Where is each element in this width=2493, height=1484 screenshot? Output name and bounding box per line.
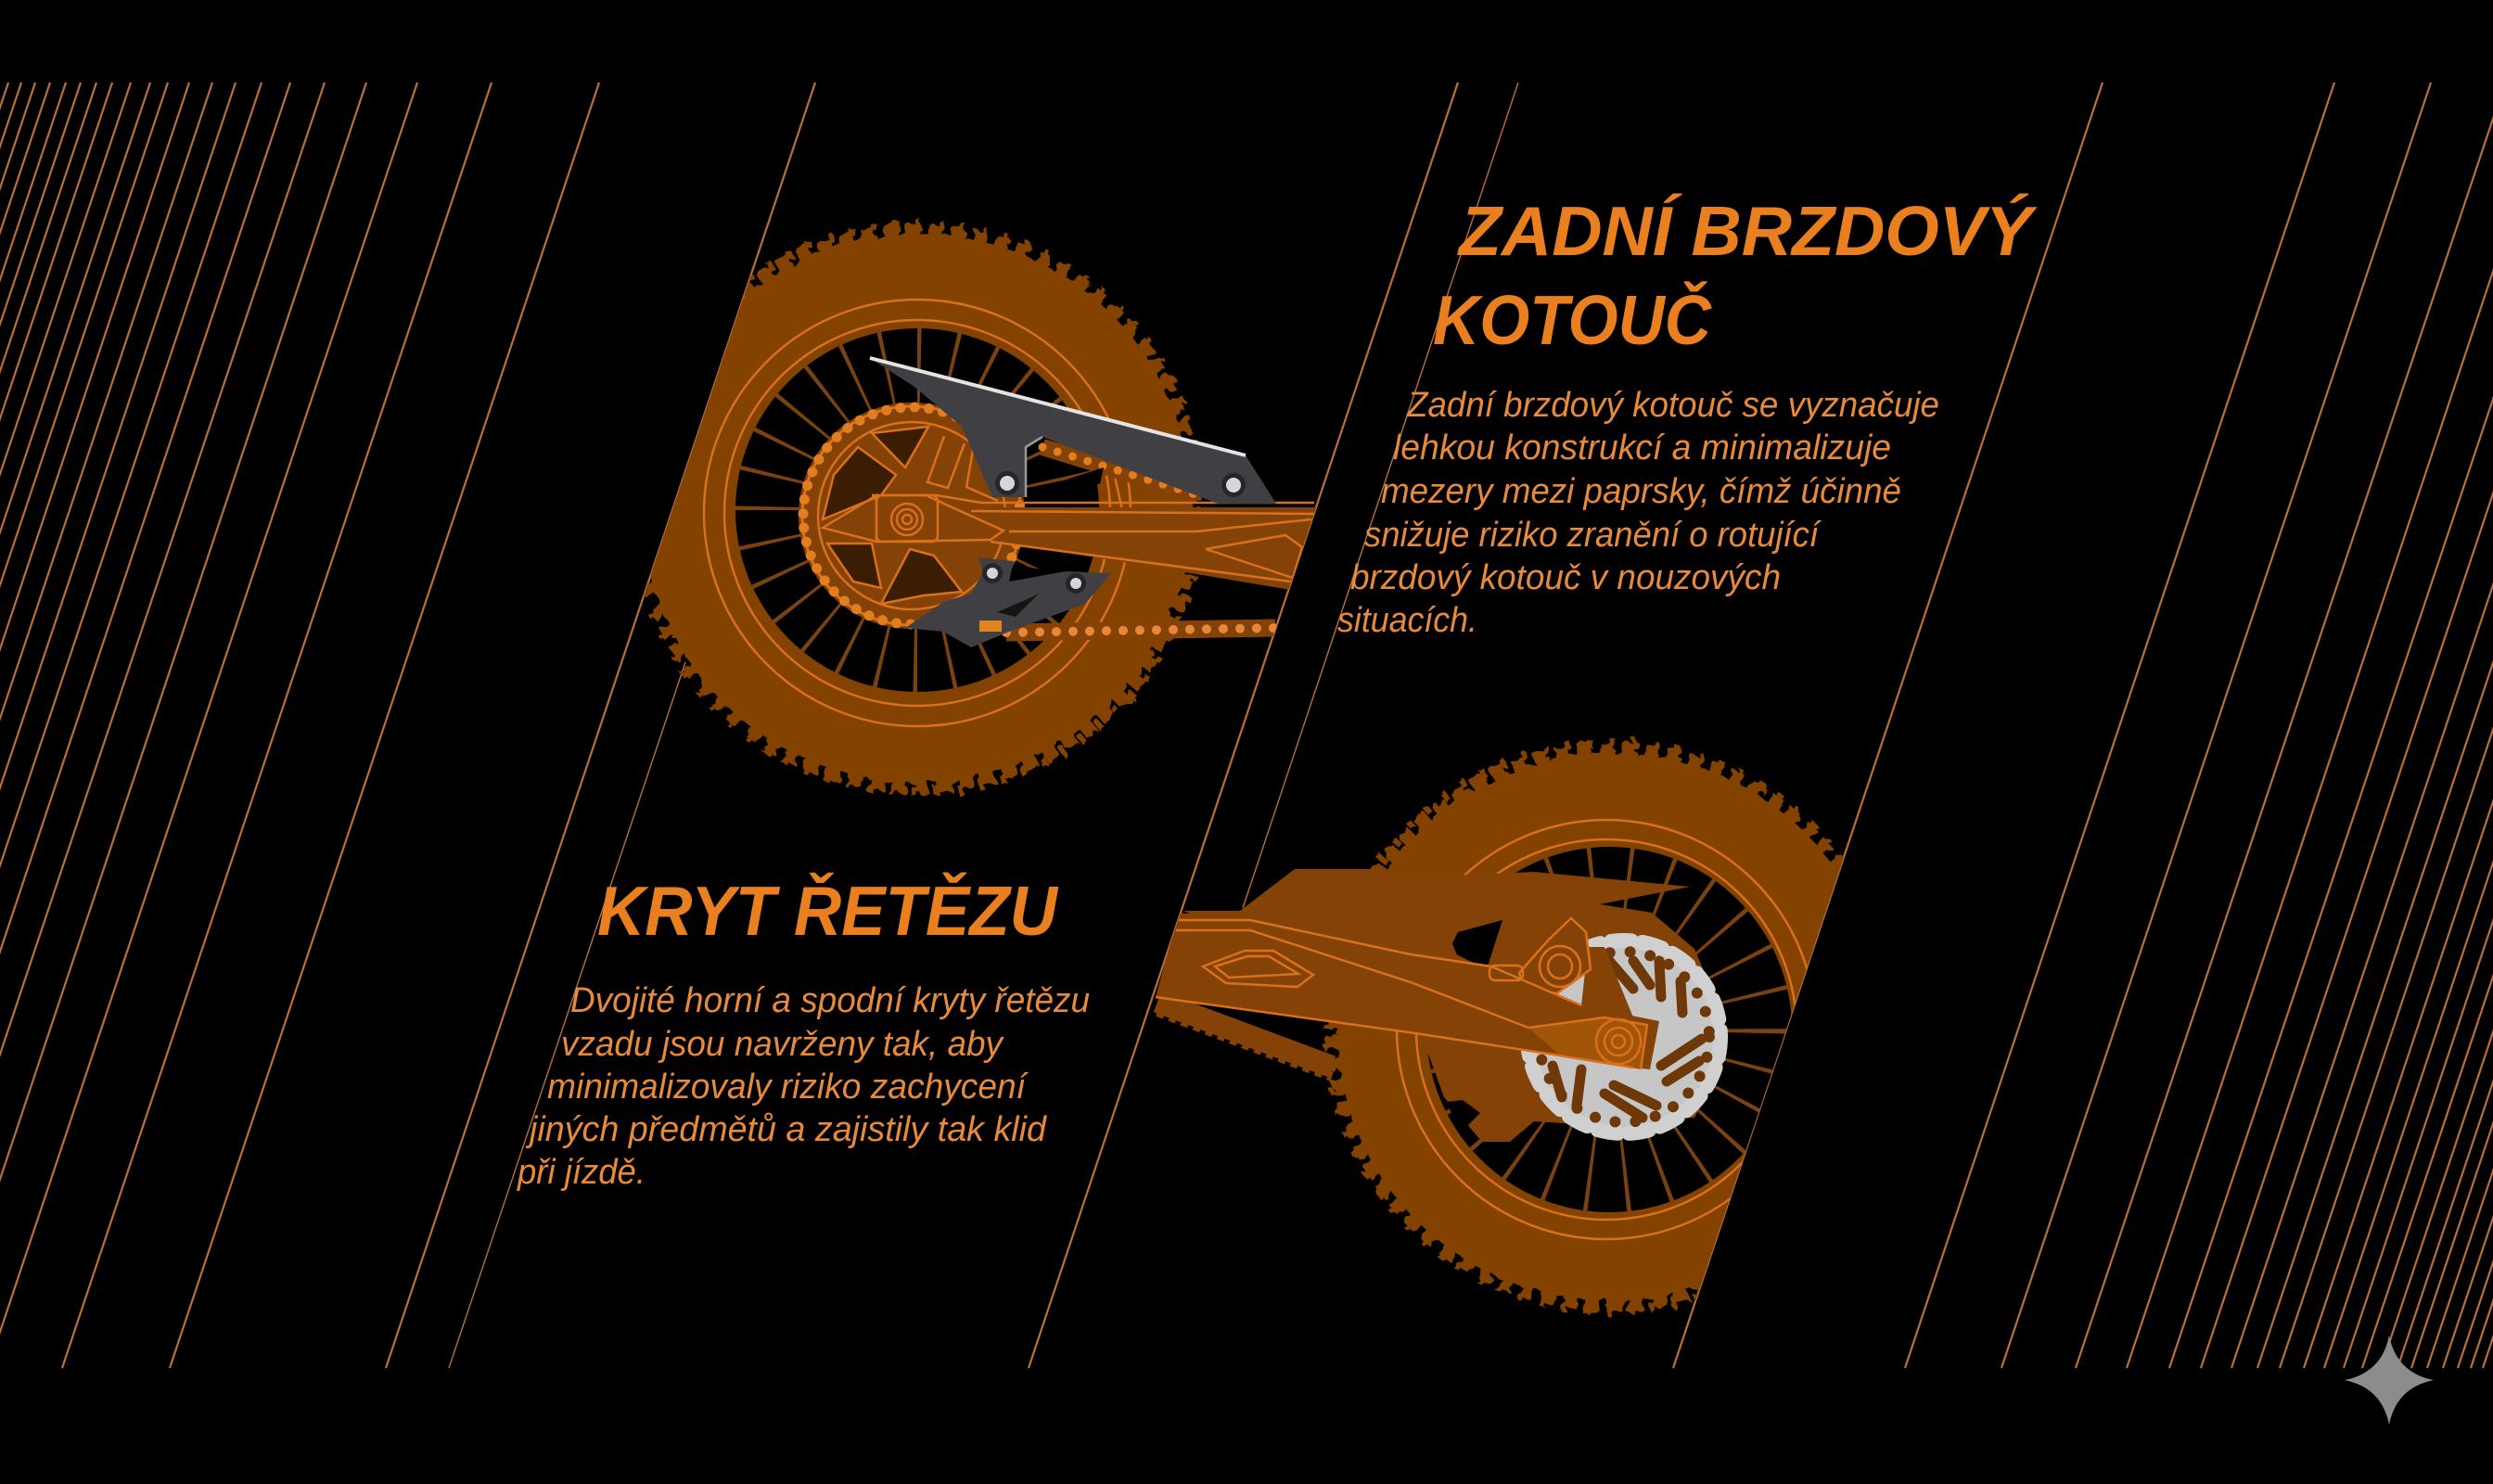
text block: chain guard description: vzadu jsou navrženy tak, aby [561, 1025, 1004, 1064]
text block: brake disc description: mezery mezi paprsky, čímž účinně [1381, 472, 1901, 511]
gaps behind upper chain [1059, 467, 1104, 484]
rim rings [1397, 820, 1816, 1239]
swingarm [1156, 913, 1659, 1069]
text block: chain guard description [517, 981, 1090, 1192]
text block: brake disc description: snižuje riziko zranění o rotující [1364, 516, 1822, 555]
text block: brake disc description [1337, 386, 1939, 640]
heading line two: kotouč: KOTOUČ [1433, 281, 1713, 359]
spoked wheel interior [735, 328, 1099, 692]
tyre with knobs [633, 224, 1201, 792]
gap under swingarm [1013, 564, 1050, 575]
sprocket [799, 403, 1122, 629]
text block: brake disc description: situacích. [1337, 601, 1477, 640]
black gaps in hub area [1448, 920, 1502, 1126]
text block: chain guard description: při jízdě. [517, 1153, 646, 1192]
heading: zadní brzdový kotouč: ZADNÍ BRZDOVÝ [1457, 192, 2038, 270]
chain run [1157, 1002, 1332, 1077]
swingarm [823, 495, 1317, 590]
icon: four-point sparkle [2345, 1336, 2434, 1425]
text block: chain guard description: minimalizovaly riziko zachycení [547, 1068, 1029, 1107]
hub shadow shape [1411, 872, 1723, 1142]
text block: brake disc description: brzdový kotouč v nouzových [1350, 558, 1781, 597]
rear wheel with chain guard [633, 224, 1317, 792]
tyre with knobs [1327, 743, 1895, 1311]
spoked wheel interior [1426, 847, 1792, 1212]
text block: brake disc description: Zadní brzdový kotouč se vyznačuje [1406, 386, 1939, 425]
upper chain guard [870, 358, 1276, 504]
rear wheel with brake disc [1156, 743, 1895, 1311]
text block: chain guard description: Dvojité horní a spodní kryty řetězu [570, 981, 1090, 1020]
text block: brake disc description: lehkou konstrukcí a minimalizuje [1393, 429, 1891, 467]
upper chain run [1042, 447, 1198, 495]
text block: chain guard description: jiných předmětů a zajistily tak klid [525, 1110, 1048, 1149]
lower chain run [1006, 628, 1275, 633]
fender and arm mount [1183, 869, 1457, 955]
brake caliper [1519, 918, 1633, 1017]
rim rings [704, 300, 1131, 726]
heading: kryt řetězu: KRYT ŘETĚZU [597, 872, 1059, 950]
brake disc [1528, 940, 1720, 1133]
lower chain guard [905, 557, 1111, 647]
